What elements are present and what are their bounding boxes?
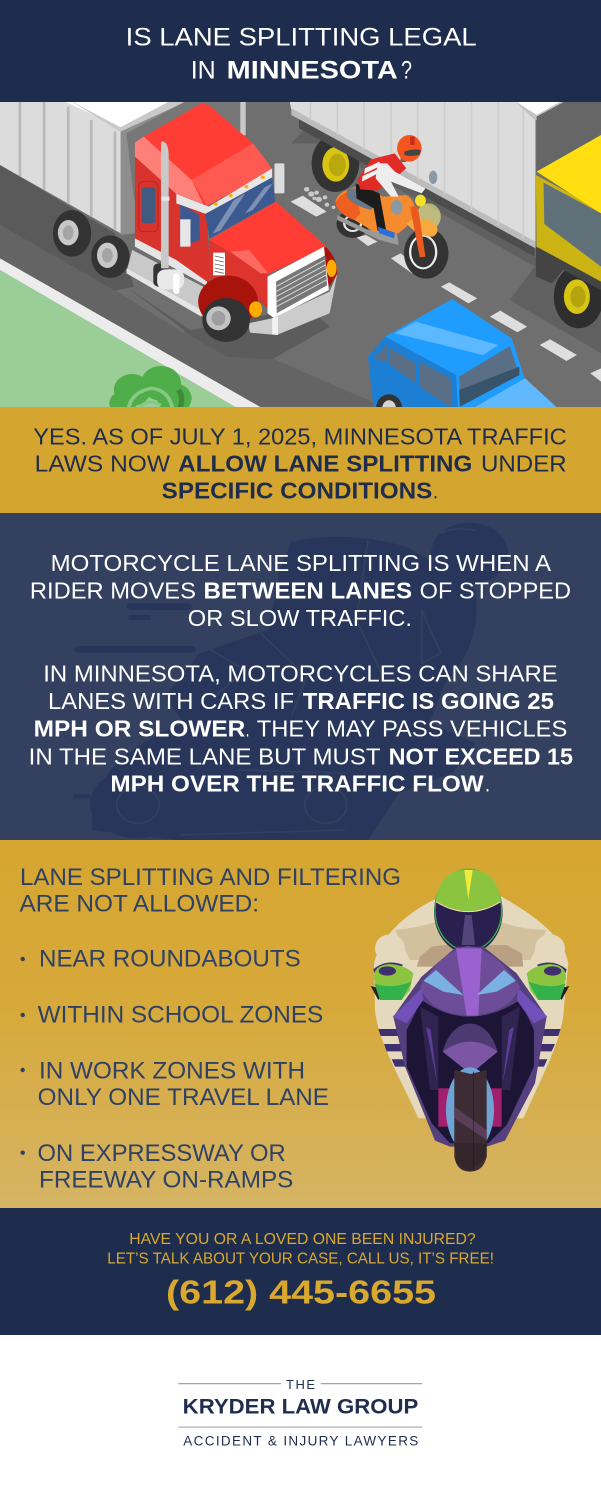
right glove (527, 962, 569, 1000)
pole (240, 102, 246, 135)
yellow truck (536, 135, 601, 328)
definition text (30, 550, 571, 631)
title (126, 24, 477, 85)
definition text: BETWEEN LANES (204, 578, 412, 604)
panel: not allowed list (0, 840, 601, 1208)
logo: The Kryder Law Group: ACCIDENT & INJURY LAWYERS (183, 1434, 418, 1449)
red truck (126, 103, 337, 359)
list item: on-ramps: ON EXPRESSWAY OR (38, 1140, 286, 1167)
panel: yes answer band (0, 407, 601, 513)
definition text: RIDER MOVES (30, 578, 196, 604)
answer text: . (433, 478, 438, 504)
answer text: LAWS NOW (35, 451, 170, 477)
call to action text: HAVE YOU OR A LOVED ONE BEEN INJURED? (129, 1231, 476, 1248)
list item: work zones: ONLY ONE TRAVEL LANE (38, 1084, 329, 1111)
grass and curb (0, 258, 263, 408)
minnesota rules text: . (246, 716, 250, 742)
minnesota rules text: . (485, 771, 490, 797)
list item: roundabouts: NEAR ROUNDABOUTS (39, 946, 301, 973)
list item: on-ramps (20, 1140, 293, 1194)
phone number: (612) 445-6655 (166, 1273, 436, 1310)
minnesota rules text: LANES WITH CARS IF (48, 688, 294, 714)
icon: green bush (109, 366, 192, 407)
minnesota rules text: THEY MAY PASS VEHICLES (257, 716, 567, 742)
minnesota rules text: IN MINNESOTA, MOTORCYCLES CAN SHARE (43, 661, 558, 687)
definition text: OF STOPPED (420, 578, 571, 604)
title: ? (401, 57, 412, 85)
answer text: SPECIFIC CONDITIONS (162, 478, 432, 504)
list heading (20, 864, 401, 918)
minnesota rules text: MPH OVER THE TRAFFIC FLOW (110, 771, 484, 797)
logo: The Kryder Law Group: THE (286, 1377, 315, 1392)
list item: work zones (20, 1057, 329, 1111)
blue car (368, 299, 556, 407)
list item: on-ramps: FREEWAY ON-RAMPS (39, 1167, 293, 1194)
lane dashes (291, 196, 601, 382)
list item: work zones: IN WORK ZONES WITH (39, 1057, 305, 1084)
title: MINNESOTA (227, 57, 398, 85)
logo: The Kryder Law Group (178, 1377, 422, 1449)
call to action text: LET’S TALK ABOUT YOUR CASE, CALL US, IT’S FREE! (107, 1250, 494, 1267)
list heading: ARE NOT ALLOWED: (20, 891, 259, 918)
left glove (371, 962, 413, 1000)
minnesota rules text: MPH OR SLOWER (34, 716, 246, 742)
minnesota rules text (29, 661, 573, 797)
answer text: UNDER (481, 451, 567, 477)
right trailer (289, 100, 601, 257)
fairing (393, 946, 547, 1172)
call to action text (107, 1231, 494, 1267)
definition text: MOTORCYCLE LANE SPLITTING IS WHEN A (51, 550, 552, 576)
panel: call to action (0, 1208, 601, 1335)
title: IS LANE SPLITTING LEGAL (126, 24, 477, 52)
definition text: OR SLOW TRAFFIC. (188, 605, 412, 631)
title: IN (191, 57, 216, 85)
watermark motorcycle (73, 523, 508, 840)
illustration: traffic scene with truck, motorcycle and car (0, 100, 601, 422)
answer text (33, 423, 567, 504)
answer text: YES. AS OF JULY 1, 2025, MINNESOTA TRAFFIC (33, 423, 567, 449)
minnesota rules text: IN THE SAME LANE BUT MUST (29, 743, 381, 769)
helmet (434, 869, 503, 953)
list item: school zones: WITHIN SCHOOL ZONES (38, 1002, 323, 1028)
motorcycle and rider (304, 135, 448, 279)
logo: The Kryder Law Group: KRYDER LAW GROUP (183, 1394, 418, 1418)
minnesota rules text: NOT EXCEED 15 (389, 743, 573, 769)
left trailer (0, 102, 184, 278)
answer text: ALLOW LANE SPLITTING (178, 451, 472, 477)
panel: definition (0, 513, 601, 840)
list heading: LANE SPLITTING AND FILTERING (20, 864, 401, 891)
minnesota rules text: TRAFFIC IS GOING 25 (303, 688, 554, 714)
header panel (0, 0, 601, 102)
illustration: front view motorcycle rider (371, 869, 569, 1172)
